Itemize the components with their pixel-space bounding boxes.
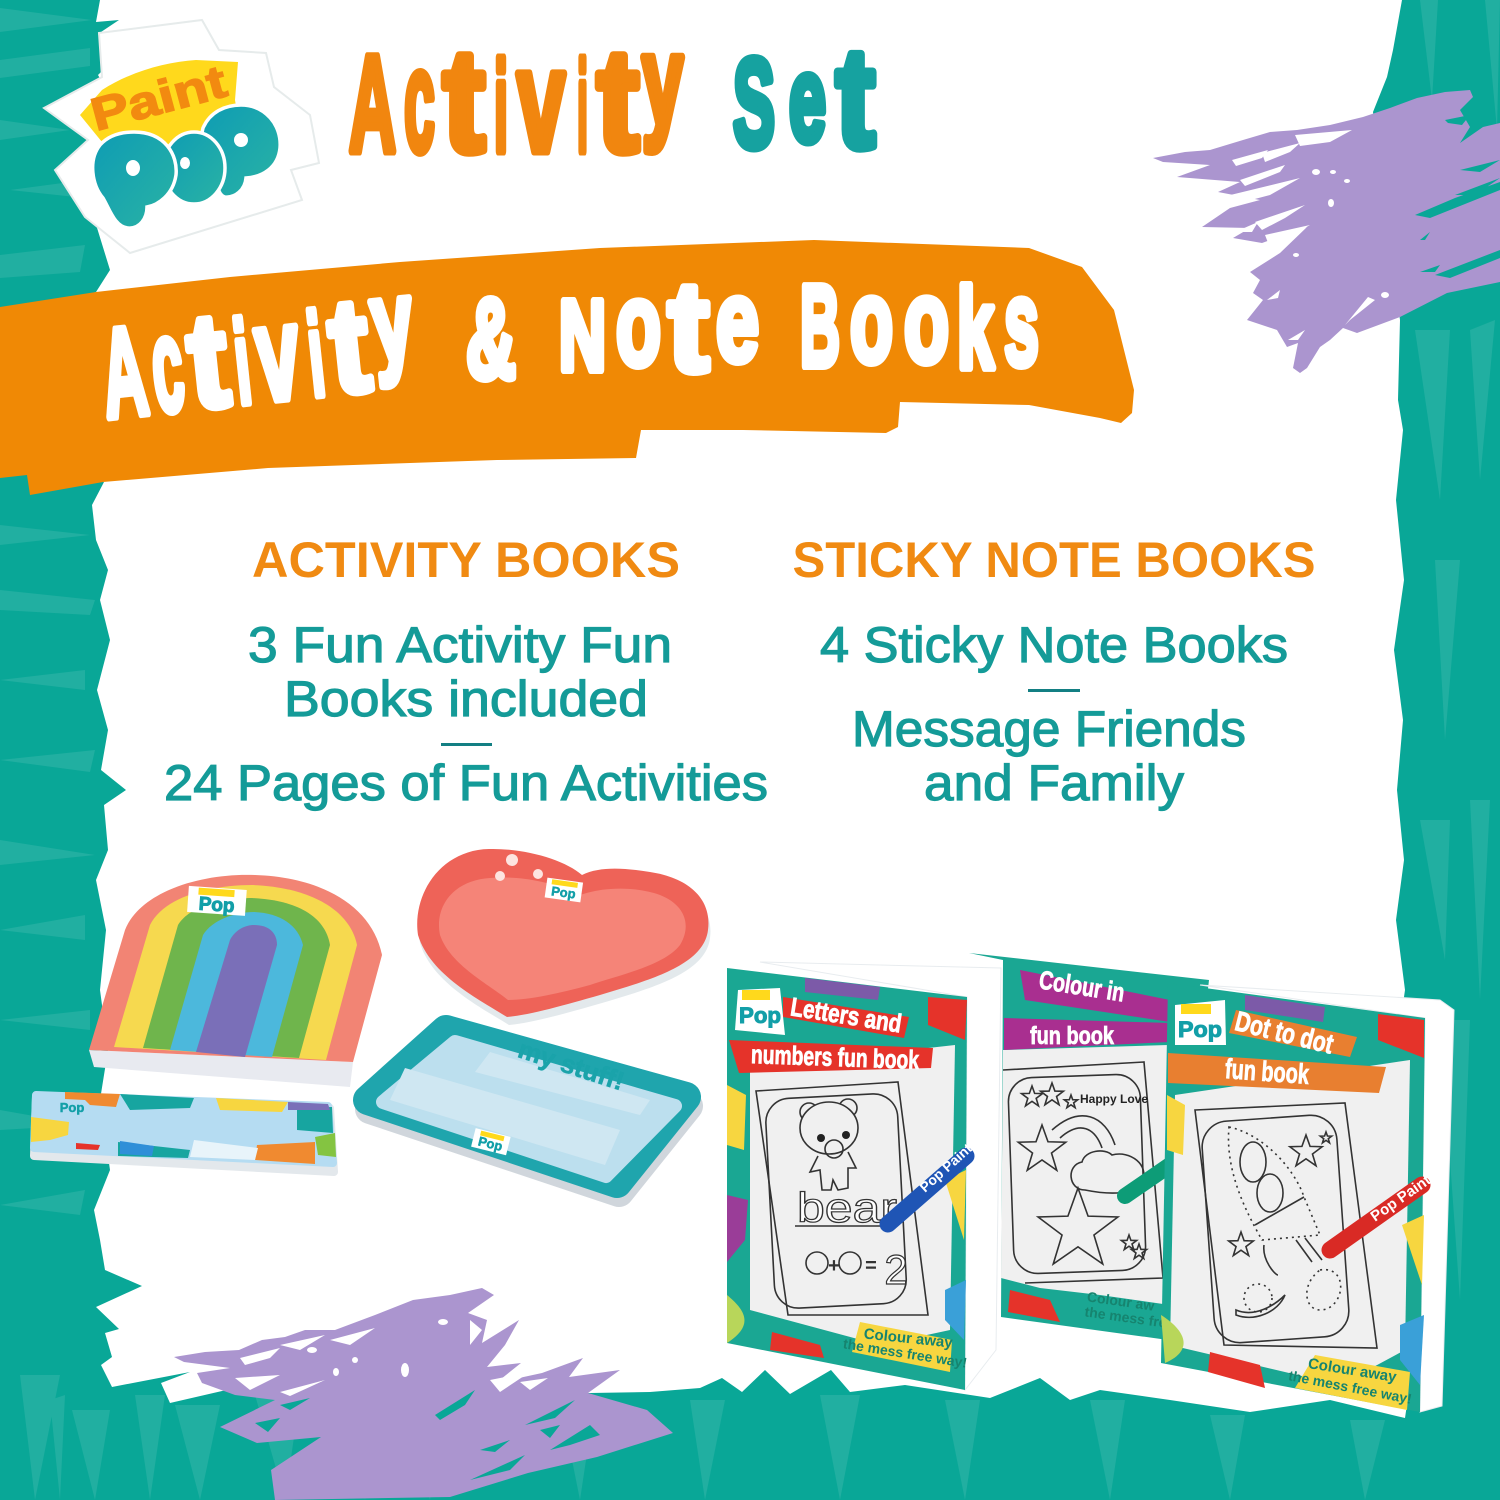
book: letters and numbers <box>727 962 1001 1390</box>
banner word: Books: s <box>1004 255 1039 391</box>
book title: Colour in <box>1037 964 1127 1008</box>
book cover <box>969 953 1209 1340</box>
mini logo <box>735 988 785 1035</box>
book title: Dot to dot <box>1232 1005 1337 1060</box>
title word: Activity: c <box>404 19 435 182</box>
title <box>349 10 875 182</box>
banner word: Activity: i <box>302 289 330 422</box>
bear <box>800 1099 858 1190</box>
colouring page: = <box>865 1255 877 1277</box>
book: colour in <box>969 953 1233 1340</box>
tagline: the mess free way! <box>1287 1367 1413 1407</box>
banner word: Activity: i <box>228 297 257 430</box>
dot to dot page <box>1195 1103 1377 1348</box>
colouring page <box>756 1082 928 1315</box>
crayon blue: Pop Paint <box>916 1140 975 1195</box>
banner word: Activity: t <box>322 270 376 422</box>
line: books included: Books included <box>284 671 648 727</box>
mini logo: Pop <box>550 883 577 902</box>
banner word: Activity: A <box>95 300 153 444</box>
banner word: Books: k <box>957 266 994 393</box>
banner word: Activity: c <box>144 290 190 441</box>
colouring page: Happy Love <box>1080 1092 1148 1106</box>
purple smudge: bottom left <box>174 1288 673 1500</box>
panel: activity books text <box>164 532 768 811</box>
logo Paint word: Paint <box>85 55 232 141</box>
mini logo: Pop <box>60 1100 84 1115</box>
crayon red <box>1330 1172 1434 1250</box>
banner word: Note: o <box>616 259 661 391</box>
sticky note: slim brush strip <box>31 1092 336 1172</box>
banner word: Books: o <box>850 256 893 388</box>
smudge teal flecks <box>1415 115 1500 278</box>
colouring page <box>1003 1062 1163 1283</box>
banner word: Note: e <box>716 256 759 386</box>
book cover <box>1161 983 1425 1412</box>
mini logo: Pop <box>198 894 235 917</box>
title word: Activity: y <box>642 10 683 153</box>
mini logo <box>471 1128 511 1155</box>
banner word: Activity: y <box>365 254 419 388</box>
book pages <box>1200 985 1454 1412</box>
logo POP counters <box>126 133 248 176</box>
title word: Activity: t <box>597 19 639 182</box>
title word: Activity: t <box>443 19 485 182</box>
smudge teal flecks <box>255 1390 600 1480</box>
banner word: Books: B <box>800 261 840 391</box>
colouring page: + <box>828 1255 840 1277</box>
my stuff label: my stuff! <box>514 1034 628 1096</box>
title word: Activity: i <box>494 36 508 179</box>
colouring page: 2 <box>884 1246 908 1293</box>
mini logo: Pop <box>477 1133 504 1154</box>
red brush mark <box>1008 1290 1060 1322</box>
book: dot to dot <box>1161 983 1454 1412</box>
mini logo: Pop <box>1178 1017 1222 1042</box>
smudge white flecks <box>235 1319 548 1396</box>
mini logo <box>1175 1000 1226 1045</box>
line: 24 pages: 24 Pages of Fun Activities <box>164 755 768 811</box>
line: and family: and Family <box>924 755 1184 811</box>
tagline: Colour away <box>863 1325 954 1352</box>
book title: Letters and <box>788 991 904 1039</box>
book: colour in: Colour aw <box>1086 1288 1155 1314</box>
title word: Activity: A <box>349 28 396 181</box>
heading: sticky note books: STICKY NOTE BOOKS <box>792 532 1316 588</box>
mini logo <box>187 886 247 918</box>
tagline: Colour away <box>1307 1355 1398 1386</box>
line: message friends: Message Friends <box>852 701 1246 757</box>
book: dot to dot: fun book <box>1224 1053 1310 1090</box>
sticky note: heart <box>417 849 710 1025</box>
line: 3 fun activity books: 3 Fun Activity Fun <box>248 617 672 673</box>
orange banner <box>0 240 1134 495</box>
colouring page: bear <box>797 1184 897 1231</box>
heading: activity books: ACTIVITY BOOKS <box>252 532 680 588</box>
title word: Set: t <box>836 19 875 178</box>
title word: Activity: v <box>517 19 565 182</box>
logo white paper patch <box>44 20 319 253</box>
book: colour in: fun book <box>1030 1022 1114 1050</box>
banner word: Books: o <box>904 256 949 388</box>
book pages <box>760 962 1001 1390</box>
logo POP letters <box>93 105 280 228</box>
book: colour in: the mess fre <box>1084 1303 1168 1331</box>
sticky note: rainbow <box>89 875 382 1087</box>
line: 4 sticky note books: 4 Sticky Note Books <box>820 617 1288 673</box>
panel: sticky note books text <box>792 532 1316 811</box>
crayon red: Pop Paint <box>1368 1172 1434 1225</box>
sticky note: my stuff <box>368 1030 688 1192</box>
mini logo <box>545 878 583 902</box>
book: letters and numbers: numbers fun book <box>751 1039 920 1075</box>
purple smudge: top right <box>1153 90 1500 373</box>
logo yellow Paint banner <box>80 60 240 150</box>
tagline: the mess free way! <box>842 1335 968 1371</box>
book cover <box>727 968 967 1390</box>
smudge white flecks <box>1218 130 1389 340</box>
banner word: Note: t <box>668 256 709 399</box>
crayon blue <box>888 1140 975 1224</box>
title word: Activity: i <box>577 36 588 179</box>
banner word: Activity: t <box>181 285 235 437</box>
title word: Set: e <box>789 31 826 167</box>
banner word: Note: N <box>559 280 606 392</box>
brand logo <box>44 20 319 253</box>
banner word: ampersand: & <box>466 276 516 403</box>
banner heading <box>93 254 1039 446</box>
banner brush shape <box>0 240 1134 495</box>
banner word: Activity: v <box>248 278 307 430</box>
title word: Set: S <box>733 33 775 174</box>
mini logo: Pop <box>739 1003 781 1028</box>
crayon green <box>1125 1165 1170 1196</box>
